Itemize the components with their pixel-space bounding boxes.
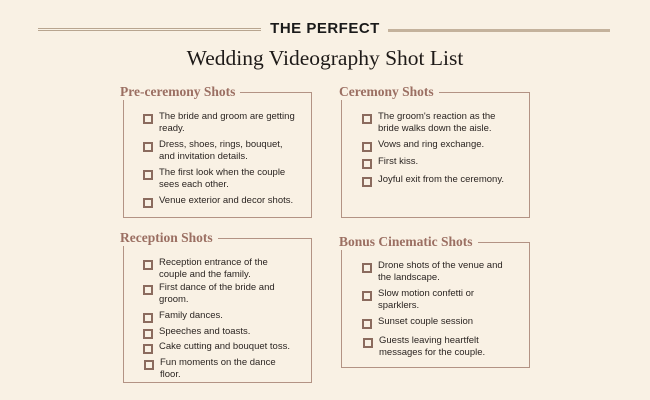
panel: reception: First dance of the bride and — [159, 282, 275, 293]
panel: reception: Family dances. — [159, 310, 223, 321]
items — [362, 260, 503, 358]
panel: bonus: Slow motion confetti or — [378, 288, 474, 299]
panel: bonus: Guests leaving heartfelt — [379, 335, 479, 346]
panel: pre-ceremony: Dress, shoes, rings, bouquet, — [159, 139, 283, 150]
panel: reception: floor. — [160, 369, 181, 380]
panel: reception: groom. — [159, 294, 189, 305]
heading: bonus: Bonus Cinematic Shots — [339, 234, 473, 249]
title: main: Wedding Videography Shot List — [187, 46, 463, 70]
panel: bonus: messages for the couple. — [379, 347, 485, 358]
items — [143, 257, 290, 380]
heading: ceremony: Ceremony Shots — [339, 84, 434, 99]
panel: bonus: sparklers. — [378, 300, 419, 311]
heading: pre-ceremony: Pre-ceremony Shots — [120, 84, 235, 99]
panel: pre-ceremony: Venue exterior and decor shots. — [159, 195, 293, 206]
panel: ceremony: Vows and ring exchange. — [378, 139, 484, 150]
title: the perfect: THE PERFECT — [270, 20, 380, 37]
panel: reception: Cake cutting and bouquet toss. — [159, 341, 290, 352]
panel: pre-ceremony: sees each other. — [159, 179, 229, 190]
heading: reception: Reception Shots — [120, 230, 213, 245]
panel: reception: Fun moments on the dance — [160, 357, 276, 368]
panel: bonus: the landscape. — [378, 272, 440, 283]
decorative lines — [38, 28, 261, 31]
panel: bonus: Sunset couple session — [378, 316, 473, 327]
panel: ceremony: The groom's reaction as the — [378, 111, 495, 122]
items — [362, 111, 504, 187]
panel: reception: couple and the family. — [159, 269, 251, 280]
panel: bonus: Drone shots of the venue and — [378, 260, 503, 271]
panel: ceremony: bride walks down the aisle. — [378, 123, 492, 134]
items — [143, 111, 295, 208]
panel: reception: Speeches and toasts. — [159, 326, 250, 337]
panel: reception: Reception entrance of the — [159, 257, 268, 268]
panel: pre-ceremony: The bride and groom are getting — [159, 111, 295, 122]
panel: pre-ceremony: The first look when the couple — [159, 167, 285, 178]
panel: pre-ceremony: ready. — [159, 123, 185, 134]
panel: ceremony: Joyful exit from the ceremony. — [378, 174, 504, 185]
panel: pre-ceremony: and invitation details. — [159, 151, 248, 162]
panel: ceremony: First kiss. — [378, 156, 418, 167]
